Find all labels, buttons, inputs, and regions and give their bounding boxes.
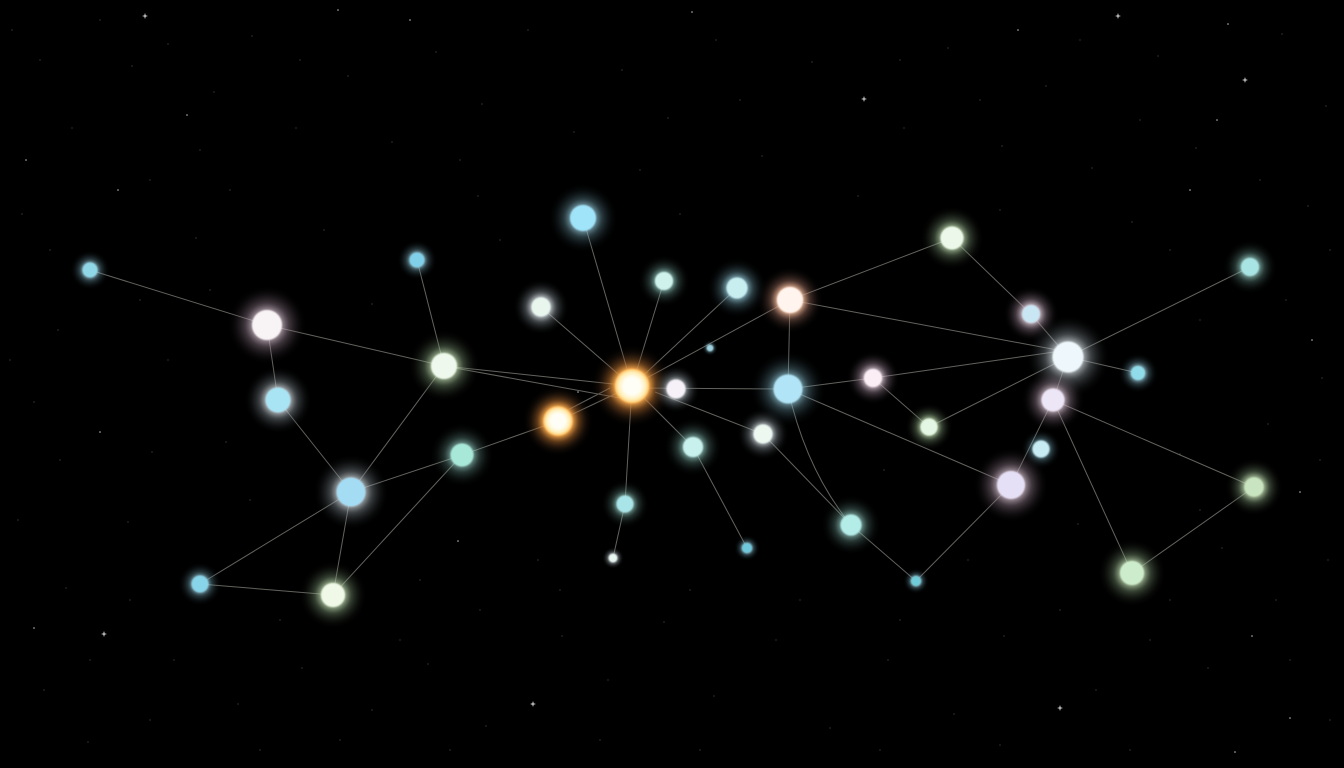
node: [1021, 368, 1085, 432]
node: [905, 403, 953, 451]
node: [1003, 286, 1059, 342]
node: [70, 250, 110, 290]
node: [737, 408, 789, 460]
node: [702, 340, 718, 356]
node: [1021, 429, 1061, 469]
node: [601, 480, 649, 528]
node: [513, 279, 569, 335]
node: [1225, 458, 1283, 516]
node: orange star: [522, 385, 594, 457]
node: [244, 366, 312, 434]
node: hub star: [590, 344, 674, 428]
node: [920, 206, 984, 270]
node: [756, 266, 824, 334]
node: [299, 561, 367, 629]
node: [1118, 353, 1158, 393]
node: [548, 183, 618, 253]
node: [903, 568, 929, 594]
node: [1098, 539, 1166, 607]
node: [397, 240, 437, 280]
node: [178, 562, 222, 606]
bright sparkle stars: [101, 13, 1248, 711]
node cluster: centre: [513, 183, 929, 594]
node: [846, 351, 900, 405]
node: [652, 365, 700, 413]
node: [602, 547, 624, 569]
node: [821, 495, 881, 555]
node: [430, 423, 494, 487]
node cluster: left: [70, 240, 494, 629]
node: [664, 418, 722, 476]
node: [408, 330, 480, 402]
node: [973, 447, 1049, 523]
node: [227, 285, 307, 365]
node: [638, 255, 690, 307]
node: [313, 454, 389, 530]
node: [1223, 240, 1277, 294]
node: [750, 351, 826, 427]
node: [1026, 315, 1110, 399]
connecting lines: [90, 218, 1254, 595]
node: [734, 535, 760, 561]
node: [707, 258, 767, 318]
node cluster: right: [846, 206, 1283, 607]
